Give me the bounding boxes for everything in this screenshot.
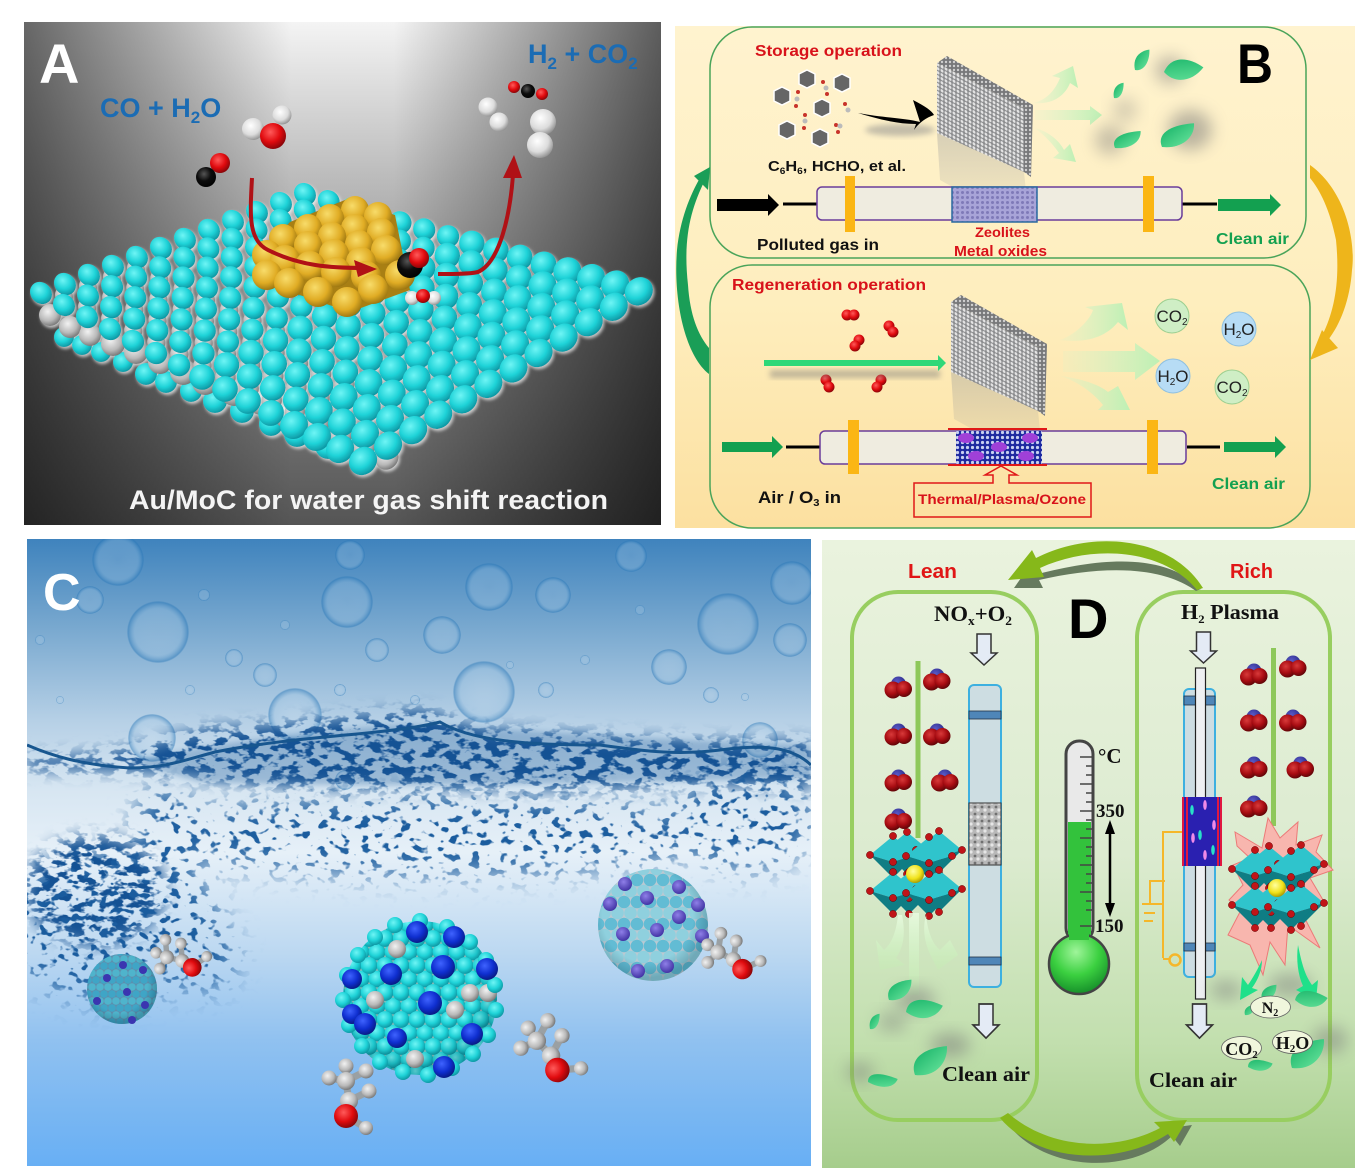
regeneration tube <box>786 420 1220 474</box>
lean perovskite catalyst <box>866 827 966 920</box>
CO2 bubble 2: 2 <box>1242 388 1248 399</box>
lean clean air label: Clean air <box>942 1062 1030 1086</box>
rich hollow arrow bottom <box>1186 1004 1212 1038</box>
MoC lattice surface <box>30 149 653 477</box>
reactants label: 2 <box>191 108 200 127</box>
H2O bubble 2: H <box>1157 367 1170 386</box>
molecule: H2 small <box>478 98 508 132</box>
temperature range arrow <box>1105 820 1115 917</box>
lean hollow arrow top <box>971 634 997 665</box>
CO2 tag: CO <box>1225 1039 1252 1059</box>
cycle arrow yellow <box>1310 165 1353 360</box>
reactants label: O <box>200 93 221 123</box>
products label: 2 <box>548 54 557 73</box>
products label: H <box>528 39 548 69</box>
products label: 2 <box>628 54 638 73</box>
H2O bubble 2 <box>1156 359 1190 393</box>
air ozone label: 3 <box>813 498 820 509</box>
H2O bubble 1 <box>1222 312 1256 346</box>
molecule: CO2 <box>508 81 548 100</box>
H2 plasma label: Plasma <box>1205 600 1280 624</box>
molecules caption: C <box>768 159 778 175</box>
adsorbent block regeneration <box>951 295 1047 469</box>
molecules caption: 6 <box>780 166 785 176</box>
H2O tag: H <box>1276 1033 1290 1053</box>
air ozone label: Air / O <box>758 489 808 507</box>
background gradient C <box>27 539 811 1166</box>
rich plasma reactor tube <box>1183 668 1221 999</box>
molecules caption: H <box>785 159 797 175</box>
lean title: Lean <box>908 561 957 583</box>
CO2 tag: 2 <box>1252 1049 1258 1061</box>
polluted gas label: Polluted gas in <box>757 237 879 254</box>
panel D: lean/rich plasma cycle <box>822 540 1355 1168</box>
floating bubbles <box>35 534 814 790</box>
molecule: adsorbed water <box>405 289 441 305</box>
N2 tag: N <box>1262 1000 1273 1017</box>
H2O tag <box>1272 1030 1312 1055</box>
storage tube <box>783 176 1217 232</box>
adsorbent block storage <box>937 56 1033 230</box>
molecule: adsorbed CO <box>397 248 429 278</box>
CO2 tag <box>1222 1036 1262 1061</box>
nanoparticle large center <box>335 913 504 1083</box>
NOx O2 label: 2 <box>1005 613 1012 628</box>
zeolites label: Zeolites <box>975 224 1030 240</box>
NOx O2 label: +O <box>975 601 1005 626</box>
background gradient B <box>675 26 1355 528</box>
rich clean air label: Clean air <box>1149 1068 1237 1092</box>
storage outlet arrow <box>1218 194 1281 216</box>
reaction arrow out <box>438 155 522 274</box>
oxygen molecules <box>820 310 898 392</box>
ethanol molecule center bottom <box>322 1058 376 1135</box>
plasma power wiring <box>1142 832 1182 966</box>
nanoparticle small left <box>87 954 157 1024</box>
light green outflow arrows <box>1033 66 1102 162</box>
350 label: 350 <box>1096 801 1124 822</box>
NOx O2 label: NO <box>934 601 967 626</box>
storage inlet arrow <box>717 194 779 216</box>
background gradient D <box>822 540 1355 1168</box>
reaction arrow in <box>251 178 377 277</box>
rich hollow arrow top <box>1190 632 1216 663</box>
clean air label bottom: Clean air <box>1212 476 1285 493</box>
metal oxides label: Metal oxides <box>954 243 1047 260</box>
treatment callout <box>914 466 1091 517</box>
CO2 bubble 2 <box>1215 370 1249 404</box>
nanoparticle right <box>598 869 709 981</box>
regeneration box <box>710 265 1310 528</box>
cycle arrow green <box>676 167 710 374</box>
regen inlet arrow <box>722 436 783 458</box>
molecule: CO <box>196 153 230 187</box>
molecule: H2 large <box>527 109 556 158</box>
H2 plasma label: H <box>1181 600 1197 624</box>
gold nanocluster <box>252 196 415 317</box>
label C: C <box>43 564 81 622</box>
N2 tag <box>1250 996 1290 1019</box>
ethanol molecule right <box>690 920 771 995</box>
thermometer <box>1049 741 1109 994</box>
panel B: storage and regeneration <box>675 26 1355 528</box>
panel C: nanoparticles in water <box>0 534 815 1166</box>
label B: B <box>1237 32 1273 95</box>
black curved arrow <box>858 100 935 136</box>
H2O bubble 1: H <box>1223 320 1236 339</box>
ethanol molecule center right <box>503 1004 594 1100</box>
molecule: water <box>242 106 292 149</box>
water surface line <box>27 722 811 768</box>
rich NOx molecules <box>1240 648 1314 826</box>
bottom cycle arrow <box>1000 1113 1192 1163</box>
NOx O2 label: x <box>968 613 975 628</box>
background gradient A <box>24 22 661 525</box>
N2 tag: 2 <box>1273 1008 1278 1019</box>
storage title: Storage operation <box>755 43 902 60</box>
lean outflow arrows <box>876 913 958 995</box>
H2O bubble 1: 2 <box>1236 330 1242 341</box>
lean box <box>852 592 1037 1120</box>
H2O tag: O <box>1295 1033 1309 1053</box>
products label: + CO <box>557 39 628 69</box>
clean air label top: Clean air <box>1216 231 1289 248</box>
CO2 bubble 1: 2 <box>1182 317 1188 328</box>
CO2 bubble 1 <box>1155 299 1189 333</box>
lean reactor tube <box>969 685 1001 987</box>
treatment callout: Thermal/Plasma/Ozone <box>918 491 1086 507</box>
H2 plasma label: 2 <box>1198 612 1205 626</box>
lean NOx molecules <box>884 661 958 838</box>
ethanol molecule small left <box>143 929 215 991</box>
sparse bubbles below surface <box>0 770 815 1000</box>
H2O bubble 2: O <box>1175 367 1189 386</box>
regeneration title: Regeneration operation <box>732 277 926 294</box>
molecules caption: , HCHO, et al. <box>803 159 906 175</box>
dark water band <box>130 725 811 785</box>
VOC molecules <box>774 70 850 147</box>
label A: A <box>39 32 79 95</box>
rich box <box>1137 592 1330 1120</box>
leaves ring storage <box>1095 49 1212 155</box>
rich title: Rich <box>1230 561 1273 583</box>
top cycle arrow <box>1008 541 1203 591</box>
CO2 bubble 2: CO <box>1216 378 1242 397</box>
light green regen arrows <box>1060 303 1160 410</box>
reactants label: CO + H <box>100 93 191 123</box>
air ozone label: in <box>820 489 841 507</box>
rich perovskite catalyst <box>1228 841 1328 934</box>
lean leaves <box>846 980 970 1093</box>
green flow arrow <box>764 355 946 378</box>
150 label: 150 <box>1095 916 1124 937</box>
molecules caption: 6 <box>797 166 803 176</box>
label D: D <box>1068 587 1108 650</box>
CO2 bubble 1: CO <box>1156 307 1182 326</box>
lean hollow arrow bottom <box>973 1004 999 1038</box>
panel A: Au/MoC water gas shift <box>24 22 661 525</box>
H2O tag: 2 <box>1290 1043 1296 1055</box>
rich plasma burst <box>1228 818 1333 975</box>
storage box <box>710 27 1306 258</box>
H2O bubble 1: O <box>1241 320 1255 339</box>
H2O bubble 2: 2 <box>1170 377 1176 388</box>
caption A: Au/MoC for water gas shift reaction <box>129 485 608 515</box>
dense foam at surface <box>25 709 811 945</box>
regen outlet arrow <box>1224 436 1286 458</box>
degrees label: °C <box>1098 744 1122 768</box>
rich leaves and arrows <box>1210 945 1348 1076</box>
